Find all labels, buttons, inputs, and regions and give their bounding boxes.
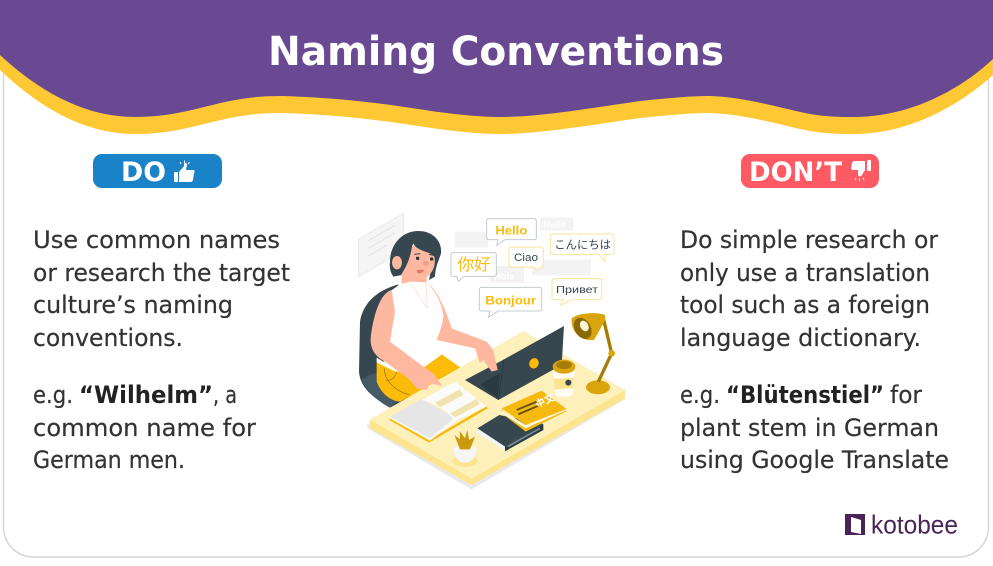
text block: dont advice: Do simple research or [680,226,938,254]
chair [359,284,412,408]
desk [367,331,625,489]
speech bubble: nihao [451,253,496,281]
text block: do advice: culture’s naming [33,291,233,319]
text block: do example: e.g. [33,381,73,409]
icon: thumbs down [851,160,871,181]
speech bubble: Hello: Hello [495,223,527,237]
laptop [465,326,564,400]
text block: do advice: conventions. [33,324,183,352]
text block: do example: “Wilhelm” [79,381,213,409]
open book [389,382,488,443]
text block: dont example: “Blütenstiel” [726,381,884,409]
text block: do example: German men. [33,446,185,474]
speech bubble: Privet: Привет [556,285,599,296]
speech bubble: nihao: 你好 [457,256,491,274]
plant pot [452,430,478,467]
hair [390,231,441,280]
speech bubble: Hello [487,219,536,245]
text block: do advice: or research the target [33,259,290,287]
text block: do example: , a [213,381,237,409]
do badge: DO [121,157,166,188]
icon: book logo [845,514,865,535]
text block: dont example: using Google Translate [680,446,949,474]
dont badge [741,154,879,188]
illustration: woman at desk with translations [359,213,625,489]
face [401,244,435,280]
dont badge: DON’T [749,157,843,188]
title: Naming Conventions [268,29,724,75]
speech bubble: Ciao: Ciao [514,252,538,264]
speech bubble: Ciao [509,247,543,271]
woman [371,231,498,390]
text block: do example [33,381,256,474]
speech bubble: Privet [552,279,602,305]
faded speech bubbles: Hola [494,271,515,281]
faded speech bubbles: Hello [543,219,566,229]
dark book [477,415,543,451]
trousers [377,354,462,402]
text block: do advice [33,226,290,352]
text block: do example: common name for [33,414,256,442]
desk lamp [570,313,615,394]
yellow book: 中文 [533,391,557,411]
speech bubble: Bonjour [479,287,542,317]
wall document [359,213,403,277]
speech bubble: konnichiwa [551,234,614,261]
yellow book [502,391,567,432]
text block: do advice: Use common names [33,226,280,254]
icon: thumbs up [174,160,195,182]
text block: dont example: e.g. [680,381,720,409]
text block: dont example [680,381,949,474]
person and desk scene [359,231,625,489]
text block: dont example: for [890,381,922,409]
header banner [0,0,993,134]
text block: dont advice: only use a translation [680,259,930,287]
text block: dont advice: tool such as a foreign [680,291,930,319]
coffee cup [553,360,575,397]
text block: dont advice [680,226,938,352]
speech bubble: konnichiwa: こんにちは [554,239,611,252]
logo: kotobee: kotobee [871,510,958,540]
speech bubble: Bonjour: Bonjour [485,293,536,307]
faded speech bubbles [455,217,591,283]
do badge [93,154,222,188]
text block: dont example: plant stem in German [680,414,939,442]
text block: dont advice: language dictionary. [680,324,921,352]
